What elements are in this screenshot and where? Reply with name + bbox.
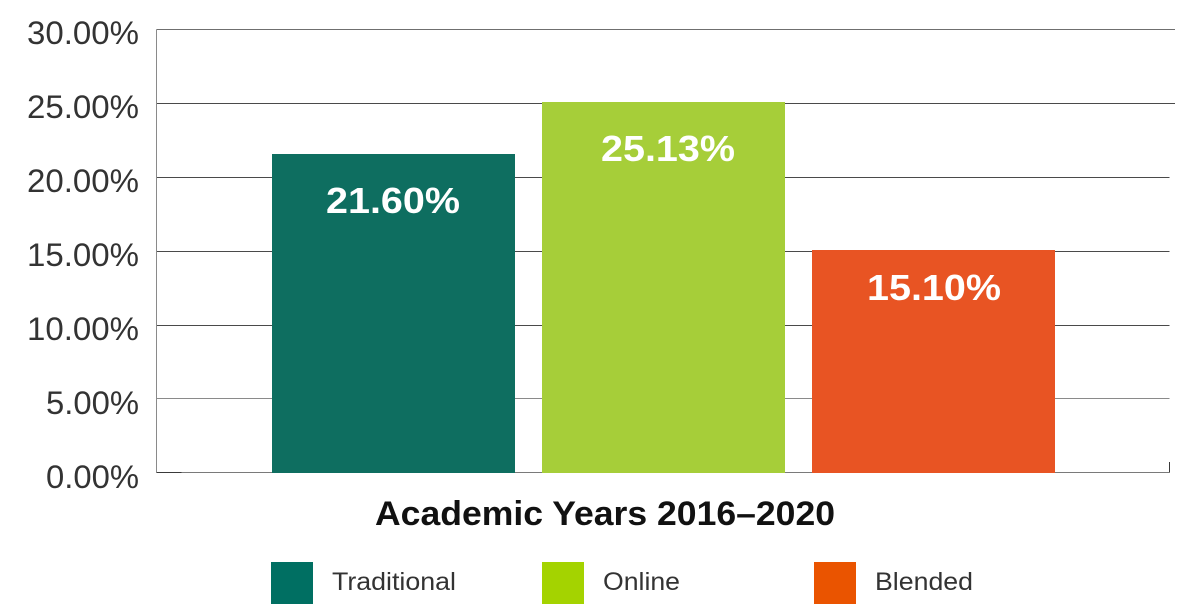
y-axis labels xyxy=(27,15,139,495)
legend: Online: Online xyxy=(603,568,680,596)
y-axis labels: 10.00% xyxy=(27,311,139,347)
bar: Traditional 21.60% xyxy=(272,154,515,473)
bar: Blended 15.10% xyxy=(812,250,1055,473)
legend: Online xyxy=(542,562,680,604)
y-axis labels: 30.00% xyxy=(27,15,139,51)
legend xyxy=(271,562,973,604)
y-axis labels: 20.00% xyxy=(27,163,139,199)
legend: Traditional xyxy=(271,562,456,604)
x-axis title: Academic Years 2016–2020 xyxy=(375,495,835,533)
bar: Online 25.13%: 25.13% xyxy=(601,128,735,169)
bar: Online 25.13% xyxy=(542,102,785,473)
legend: Blended xyxy=(814,562,973,604)
y-axis labels: 5.00% xyxy=(46,385,139,421)
y-axis labels: 25.00% xyxy=(27,89,139,125)
legend: Blended: Blended xyxy=(875,568,973,596)
y-axis labels: 15.00% xyxy=(27,237,139,273)
bar: Traditional 21.60%: 21.60% xyxy=(326,180,460,221)
y-axis labels: 0.00% xyxy=(46,459,139,495)
legend: Traditional: Traditional xyxy=(332,568,456,596)
bar: Blended 15.10%: 15.10% xyxy=(867,267,1001,308)
